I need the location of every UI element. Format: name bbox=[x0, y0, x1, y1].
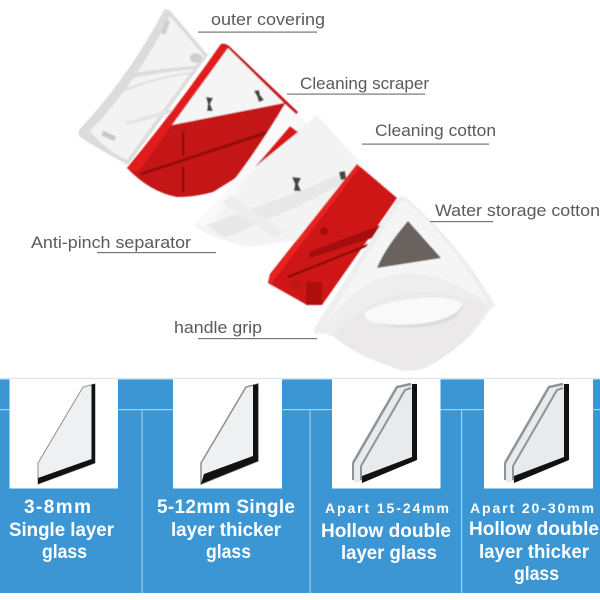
text: apart 15-24mm hollow double layer glass: layer glass bbox=[341, 543, 437, 564]
text: 3-8mm single layer glass bbox=[9, 497, 115, 563]
text: 5-12mm single layer thicker glass: 5-12mm Single bbox=[157, 497, 295, 518]
part: red water storage holder bbox=[268, 164, 397, 305]
icon: grey sponge bbox=[377, 221, 441, 268]
label: cleaning cotton: Cleaning cotton bbox=[375, 121, 496, 140]
text: 3-8mm single layer glass: glass bbox=[42, 542, 87, 563]
icon: glass section bbox=[38, 384, 95, 484]
text: apart 15-24mm hollow double layer glass: Hollow double bbox=[321, 521, 451, 542]
label: anti-pinch separator: Anti-pinch separator bbox=[31, 233, 191, 252]
label: water storage cotton: Water storage cotton bbox=[435, 201, 600, 220]
part: handle grip front body bbox=[314, 196, 494, 370]
text: apart 20-30mm hollow double layer thicker glass: glass bbox=[514, 564, 559, 585]
text: apart 15-24mm hollow double layer glass bbox=[321, 500, 451, 564]
text: apart 20-30mm hollow double layer thicker glass: Apart 20-30mm bbox=[470, 500, 594, 516]
part: cleaning scraper bbox=[127, 44, 298, 197]
text: apart 20-30mm hollow double layer thicker glass: layer thicker bbox=[479, 542, 590, 563]
text: apart 15-24mm hollow double layer glass: Apart 15-24mm bbox=[325, 500, 449, 516]
exploded product: window cleaner parts bbox=[78, 9, 494, 371]
card: hollow double layer glass bbox=[321, 379, 451, 564]
text: 3-8mm single layer glass: Single layer bbox=[9, 520, 115, 541]
text: 5-12mm single layer thicker glass: layer thicker bbox=[171, 520, 282, 541]
text: apart 20-30mm hollow double layer thicker glass bbox=[469, 500, 599, 585]
icon: double glass section bbox=[504, 383, 569, 483]
label: handle grip: handle grip bbox=[174, 318, 262, 337]
part: outer covering bbox=[78, 9, 208, 165]
label: outer covering: outer covering bbox=[211, 10, 325, 29]
label: cleaning scraper: Cleaning scraper bbox=[300, 74, 429, 93]
part: cleaning cotton and anti-pinch separator bbox=[194, 104, 362, 247]
card: single layer glass bbox=[9, 379, 118, 563]
card: hollow double layer thicker glass bbox=[469, 379, 599, 585]
card: single layer thicker glass bbox=[157, 379, 295, 563]
text: apart 20-30mm hollow double layer thicker glass: Hollow double bbox=[469, 519, 599, 540]
text: 5-12mm single layer thicker glass: glass bbox=[206, 542, 251, 563]
text: 5-12mm single layer thicker glass bbox=[157, 497, 295, 563]
panel: glass types bbox=[0, 378, 600, 593]
icon: glass section bbox=[201, 384, 258, 484]
text: 3-8mm single layer glass: 3-8mm bbox=[24, 497, 91, 518]
icon: double glass section bbox=[352, 383, 417, 483]
